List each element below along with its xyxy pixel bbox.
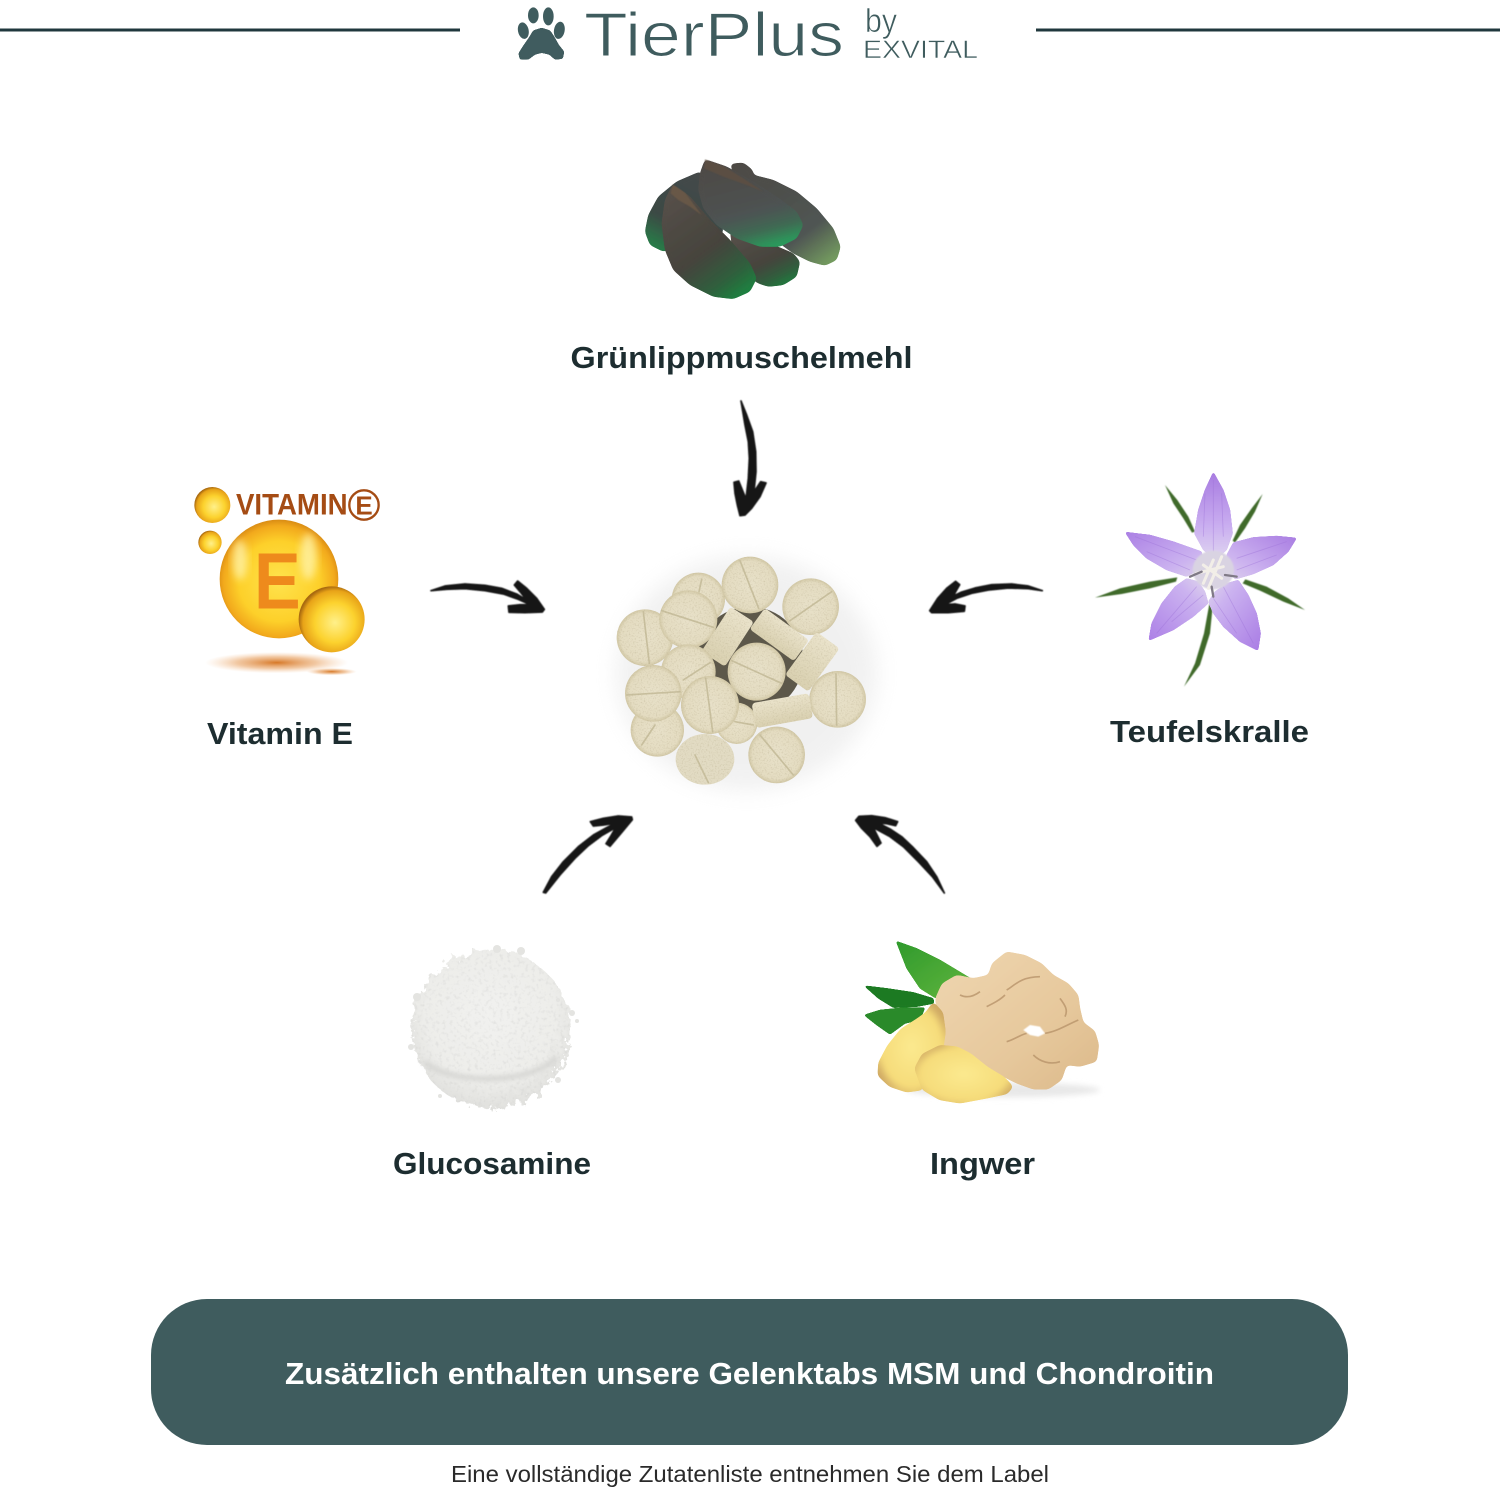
arrow: left <box>431 581 544 613</box>
icon: green-lipped mussels <box>645 159 841 299</box>
logo by: by <box>865 2 897 39</box>
vitamin E circled letter: E <box>355 490 373 520</box>
header line right <box>1036 28 1500 32</box>
arrow: bottom left <box>543 816 632 893</box>
label: Glucosamine: Glucosamine <box>393 1146 591 1181</box>
icon: ginger <box>864 941 1100 1103</box>
tablets photo <box>617 557 877 790</box>
vitamin E wordmark: VITAMIN <box>236 488 348 521</box>
arrow: bottom right <box>856 816 944 893</box>
callout text: Zusätzlich enthalten unsere Gelenktabs MSM und Chondroitin <box>285 1356 1214 1391</box>
vitamin E big letter: E <box>254 536 301 625</box>
icon: vitamin E <box>194 487 379 675</box>
label: Teufelskralle: Teufelskralle <box>1110 714 1309 749</box>
icon: purple flower <box>1095 472 1305 687</box>
label: Grünlippmuschelmehl: Grünlippmuschelmehl <box>570 340 912 375</box>
header line left <box>0 28 460 32</box>
label: Vitamin E: Vitamin E <box>207 716 353 751</box>
arrow: right <box>930 581 1042 613</box>
label: Ingwer: Ingwer <box>930 1146 1035 1181</box>
logo: TierPlus by EXVITAL <box>516 1 978 70</box>
icon: powder pile <box>408 945 579 1108</box>
icon: paw <box>516 7 566 59</box>
footnote: Eine vollständige Zutatenliste entnehmen Sie dem Label <box>451 1461 1049 1487</box>
arrow: top <box>734 401 766 516</box>
logo EXVITAL: EXVITAL <box>863 36 978 64</box>
logo wordmark: TierPlus <box>584 1 844 70</box>
callout panel <box>151 1299 1348 1445</box>
